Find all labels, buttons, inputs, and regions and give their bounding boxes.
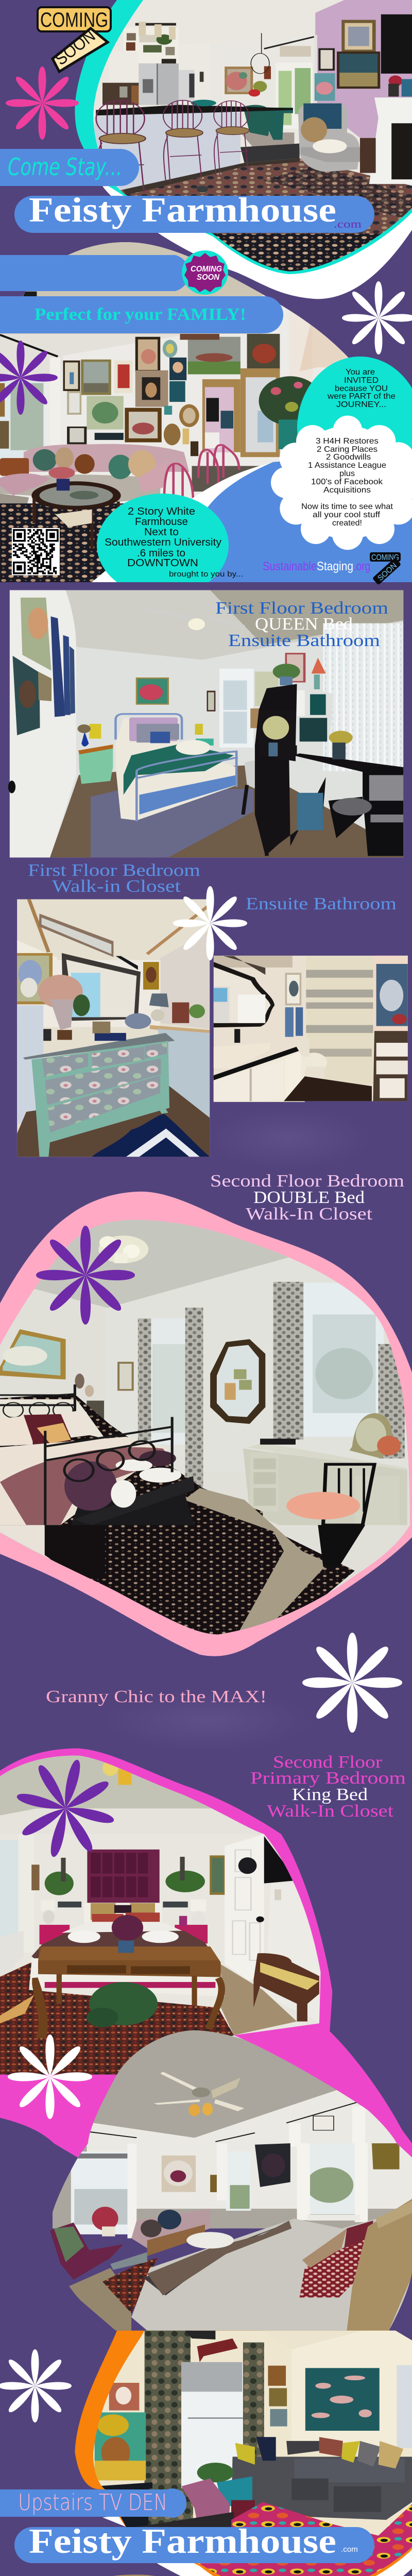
- title: Feisty Farmhouse banner: Feisty Farmhouse: [29, 190, 336, 229]
- badge: coming soon sign: [38, 7, 111, 72]
- callout: white cloud list of thrift sources: Now its time to see what: [301, 502, 393, 511]
- heading: second floor primary bedroom: King Bed: [292, 1785, 368, 1804]
- callout: white cloud list of thrift sources: Acquisitions: [323, 486, 371, 495]
- logo: SustainableStaging.org: .org: [353, 560, 370, 573]
- badge: small coming soon: [370, 552, 402, 586]
- decoration: teal hero border: [75, 0, 412, 274]
- bubble: two story white farmhouse: brought to you by...: [169, 570, 243, 579]
- bubble: you are invited: You are: [346, 368, 375, 377]
- heading: ensuite bathroom: Ensuite Bathroom: [246, 894, 397, 913]
- badge: small coming soon: SOON: [376, 561, 399, 583]
- caption: granny chic: Granny Chic to the MAX!: [46, 1687, 267, 1706]
- logo: SustainableStaging.org: [263, 560, 370, 573]
- icon: coming soon starburst badge: COMING: [191, 265, 222, 274]
- heading: walk-in closet: Walk-in Closet: [52, 877, 181, 896]
- heading: second floor bedroom: [210, 1172, 404, 1224]
- callout: white cloud list of thrift sources: 2 Goodwills: [326, 453, 371, 462]
- bubble: two story white farmhouse: [97, 494, 242, 582]
- callout: white cloud list of thrift sources: all your cool stuff: [313, 511, 381, 519]
- badge: coming soon sign: SOON: [52, 26, 99, 69]
- panel: details area in blue: [89, 357, 412, 597]
- panel: first floor bedroom photo: [8, 590, 403, 857]
- icon: coming soon starburst badge: SOON: [197, 273, 219, 282]
- bubble: two story white farmhouse: 2 Story White: [128, 506, 195, 517]
- icon: purple flower: [5, 1748, 126, 1869]
- icon: white flower: [302, 1633, 402, 1733]
- heading: second floor primary bedroom: Walk-In Closet: [267, 1802, 394, 1821]
- decoration: white swoop under hero photo: [102, 184, 412, 299]
- panel: walk-in closet photo: [17, 899, 210, 1157]
- heading: perfect for your family banner: Perfect for your FAMILY!: [35, 305, 246, 324]
- title: Feisty Farmhouse banner: .com: [334, 217, 362, 230]
- panel: family room photo: [0, 242, 349, 582]
- icon: pink flower: [6, 66, 79, 140]
- heading: perfect for your family banner: [0, 296, 283, 333]
- panel: upstairs TV den photo: [93, 2331, 412, 2576]
- icon: white flower: [8, 2035, 92, 2119]
- panel: primary bedroom photos: [0, 1751, 412, 2331]
- bubble: you are invited: were PART of the: [327, 392, 396, 401]
- heading: walk-in closet: [28, 861, 200, 896]
- callout: white cloud list of thrift sources: 2 Caring Places: [317, 445, 377, 454]
- heading: come stay banner: [0, 149, 139, 186]
- bubble: two story white farmhouse: Southwestern University: [105, 537, 221, 548]
- heading: first floor bedroom queen bed: Ensuite Bathroom: [228, 631, 380, 650]
- bubble: two story white farmhouse: DOWNTOWN: [127, 557, 198, 569]
- icon: white flower on purple: [0, 2349, 72, 2422]
- icon: coming soon starburst badge: [182, 250, 228, 295]
- heading: come stay banner: Come Stay...: [8, 153, 122, 181]
- decoration: orange den border: [75, 2331, 412, 2576]
- decoration: white swoop under den photo: [102, 2512, 412, 2576]
- panel: second floor bedroom photo: [0, 1208, 412, 1662]
- panel: up cafe basketball photo: [113, 2574, 154, 2576]
- callout: white cloud list of thrift sources: created!: [332, 519, 362, 528]
- heading: first floor bedroom queen bed: First Floor Bedroom: [215, 599, 388, 618]
- decoration: pink blob frame: [0, 1192, 412, 1656]
- bubble: two story white farmhouse: Next to: [144, 527, 179, 538]
- icon: purple flower on pink blob: [36, 1226, 135, 1325]
- badge: small coming soon: COMING: [371, 553, 399, 562]
- heading: second floor primary bedroom: Second Floor: [273, 1753, 383, 1772]
- logo: SustainableStaging.org: Sustainable: [263, 560, 317, 573]
- heading: second floor primary bedroom: Primary Bedroom: [250, 1769, 406, 1788]
- title: Feisty Farmhouse banner: [14, 190, 374, 233]
- decorative blue banner: [0, 255, 189, 291]
- QR code: [12, 528, 60, 575]
- title: Feisty Farmhouse banner 2: [14, 2521, 374, 2563]
- bubble: you are invited: because YOU: [335, 384, 388, 393]
- callout: white cloud list of thrift sources: 3 H4H Restores: [316, 437, 379, 446]
- bubble: two story white farmhouse: .6 miles to: [137, 548, 185, 559]
- callout: white cloud list of thrift sources: [271, 416, 412, 550]
- callout: white cloud list of thrift sources: 100's of Facebook: [311, 478, 383, 486]
- icon: white flower: [342, 281, 412, 354]
- title: Feisty Farmhouse banner 2: Feisty Farmhouse: [29, 2521, 336, 2561]
- callout: white cloud list of thrift sources: plus: [339, 469, 355, 478]
- heading: second floor primary bedroom: [250, 1753, 406, 1821]
- title: Feisty Farmhouse banner 2: .com: [341, 2545, 358, 2554]
- heading: walk-in closet: First Floor Bedroom: [28, 861, 200, 880]
- icon: white flower on closet photo: [173, 886, 247, 960]
- bubble: you are invited: [297, 357, 412, 450]
- bubble: two story white farmhouse: Farmhouse: [135, 516, 188, 528]
- panel: ensuite bathroom photo: [214, 956, 408, 1102]
- bubble: you are invited: JOURNEY...: [336, 400, 386, 409]
- logo: SustainableStaging.org: Staging: [317, 560, 353, 573]
- heading: second floor bedroom: DOUBLE Bed: [253, 1188, 365, 1207]
- panel: hero photo of kitchen and living room: [93, 0, 412, 272]
- decoration: magenta blob frame: [0, 1749, 412, 2274]
- heading: first floor bedroom queen bed: QUEEN Bed: [255, 615, 353, 634]
- heading: second floor bedroom: Walk-In Closet: [246, 1205, 373, 1224]
- callout: white cloud list of thrift sources: 1 Assistance League: [308, 461, 386, 470]
- heading: second floor bedroom: Second Floor Bedroom: [210, 1172, 404, 1191]
- badge: coming soon sign: COMING: [40, 9, 108, 31]
- heading: upstairs tv den banner: Upstairs TV DEN: [18, 2489, 167, 2516]
- heading: first floor bedroom queen bed: [215, 599, 388, 650]
- bubble: you are invited: INVITED: [344, 376, 379, 385]
- icon: purple flower: [0, 341, 58, 415]
